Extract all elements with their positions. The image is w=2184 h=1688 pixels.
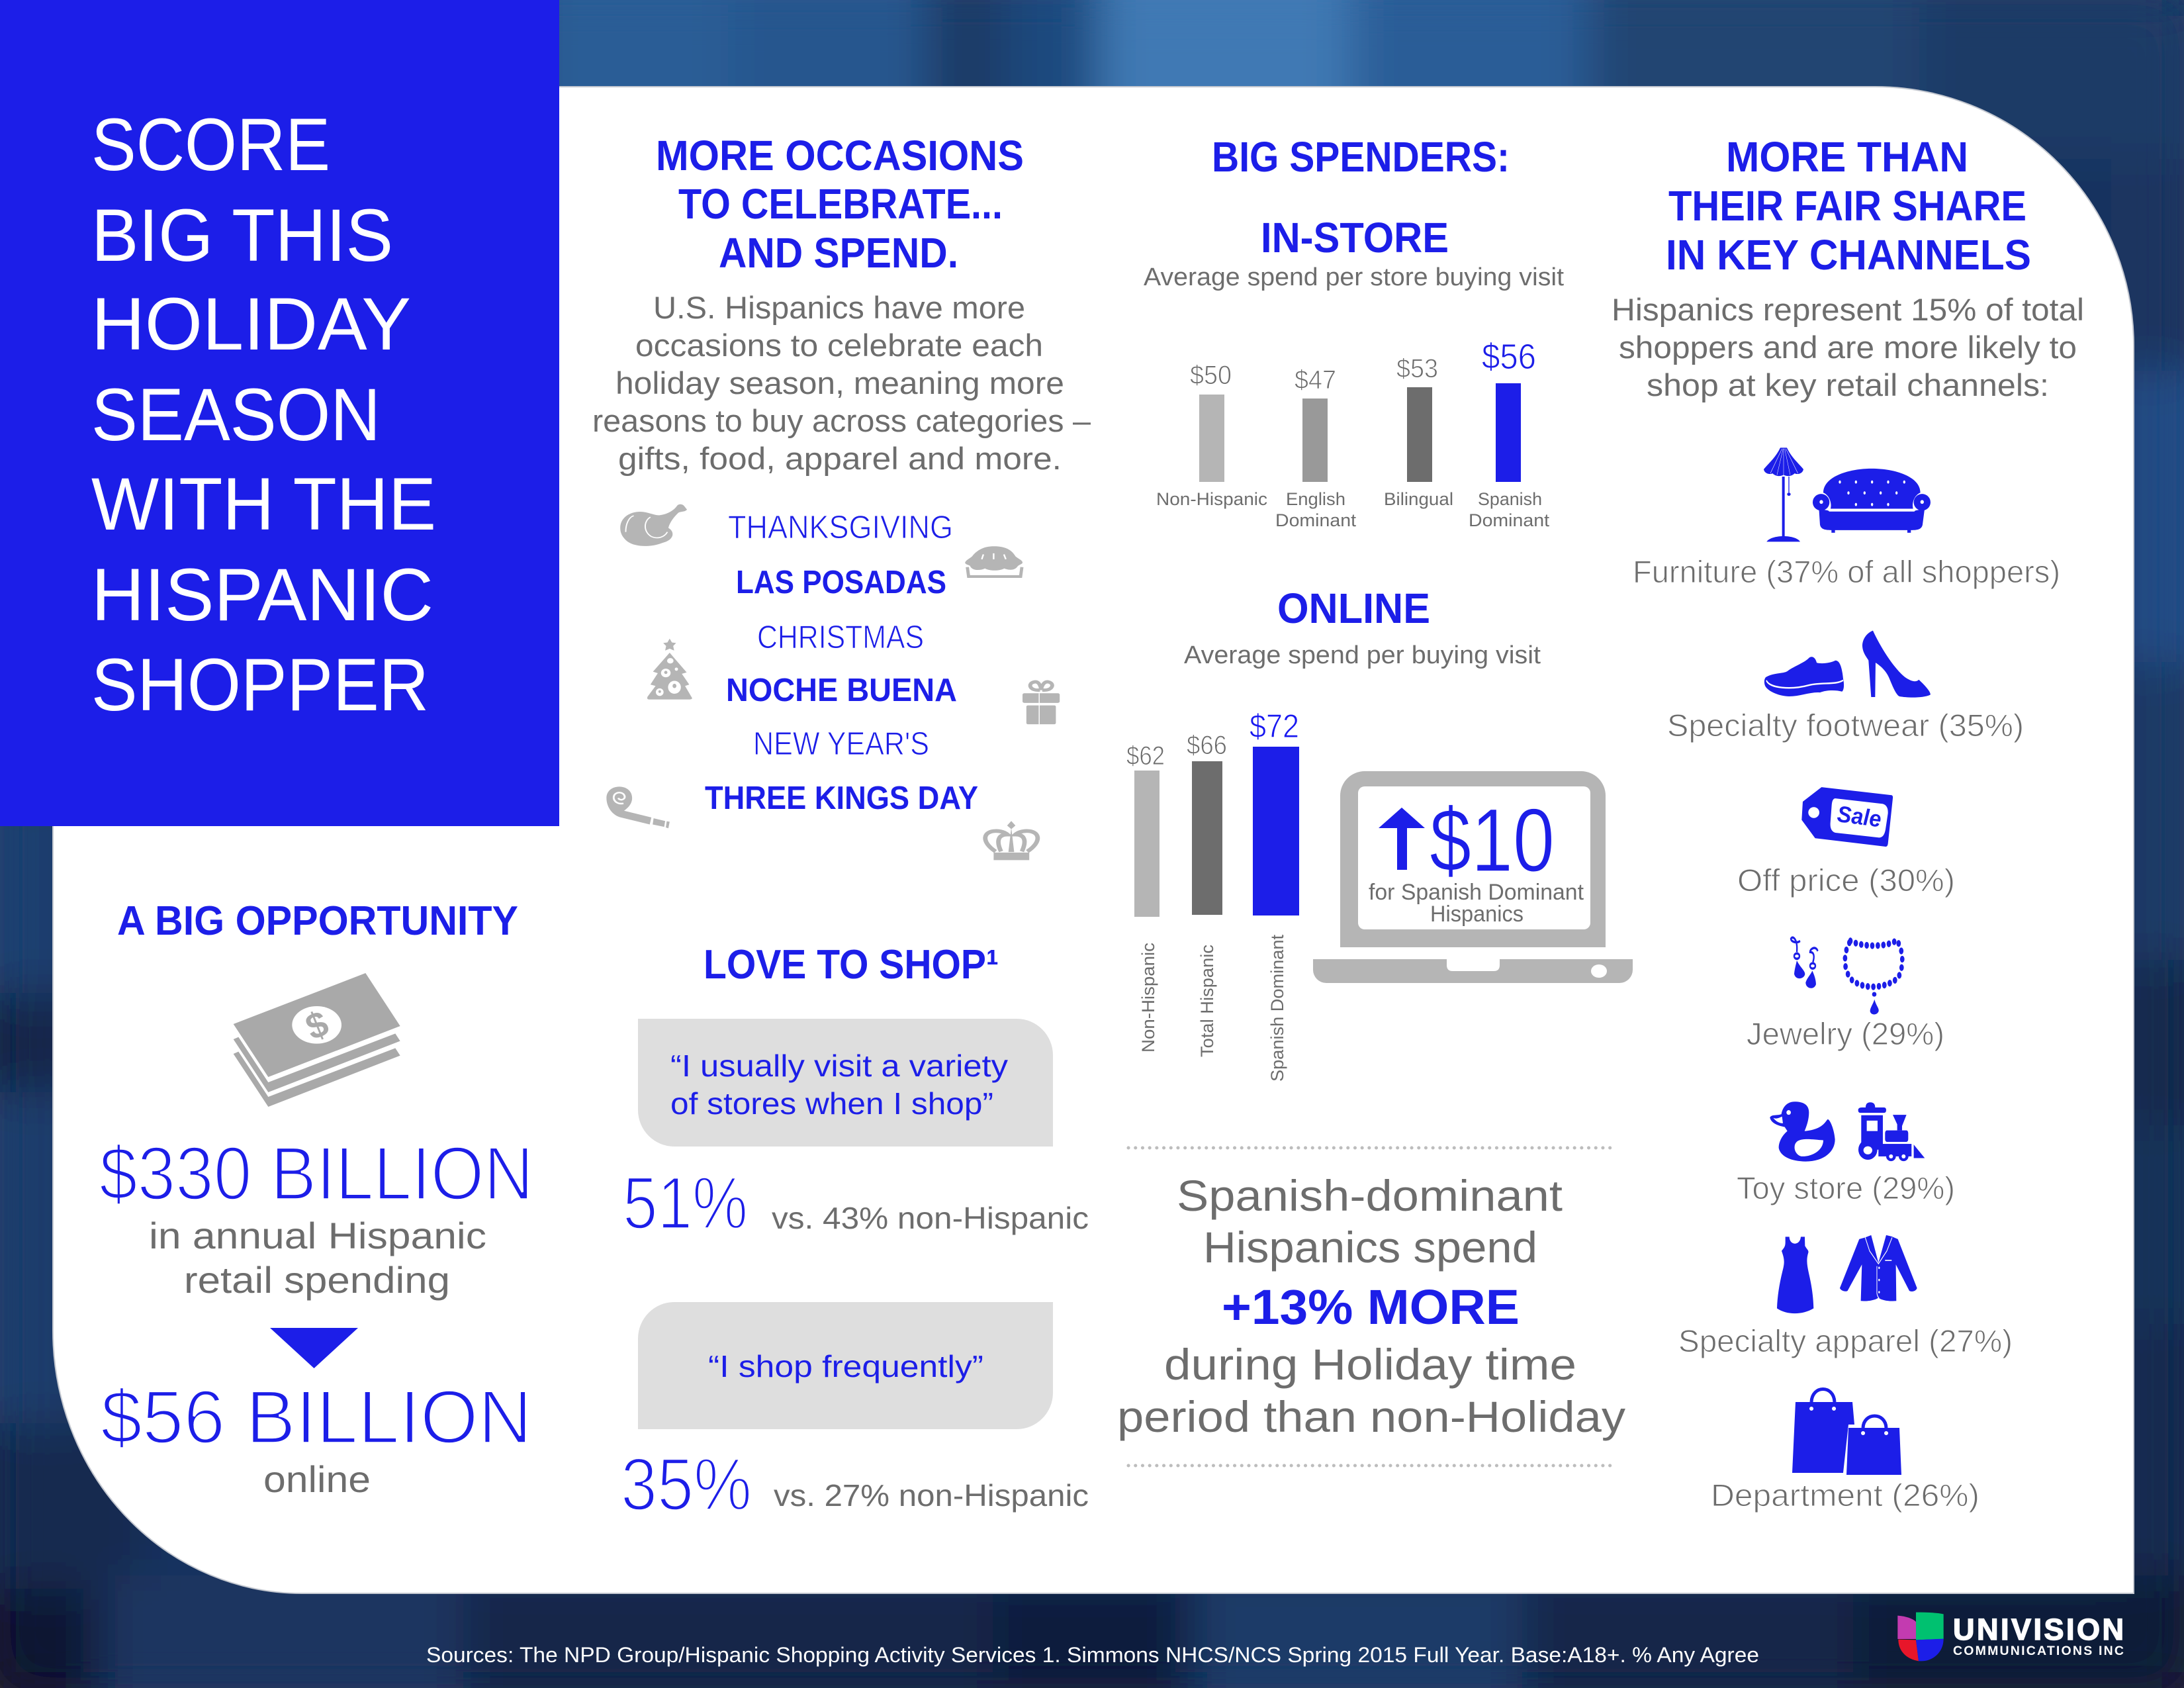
- heading: fair share: IN KEY CHANNELS: [1666, 231, 2031, 279]
- heading: more occasions: TO CELEBRATE...: [678, 180, 1003, 228]
- text: occasions paragraph: holiday season, meaning more: [615, 365, 1064, 400]
- comparison: 27 percent: vs. 27% non-Hispanic: [774, 1478, 1089, 1513]
- heading: fair share: MORE THAN: [1726, 133, 1968, 181]
- caption: for spanish dominant hispanics: [1369, 880, 1584, 927]
- bar chart: in-store spend: $47: [1295, 365, 1336, 395]
- icon: sale tag: Sale: [1837, 802, 1882, 833]
- heading: a big opportunity: A BIG OPPORTUNITY: [117, 898, 518, 944]
- channel labels: Department (26%): [1711, 1477, 1979, 1513]
- icon: down arrow: [270, 1328, 358, 1368]
- icon: gift: [1023, 682, 1060, 724]
- bar chart: online spend: [1126, 708, 1299, 1082]
- logo: univision: COMMUNICATIONS INC: [1953, 1644, 2124, 1658]
- text: in annual hispanic retail spending: in annual Hispanic: [149, 1215, 486, 1256]
- icon: rubber duck: [1770, 1102, 1835, 1162]
- bar chart: online spend: $62: [1126, 741, 1165, 771]
- icon: laptop callout: [1313, 771, 1633, 983]
- holiday list: NOCHE BUENA: [726, 673, 957, 708]
- quote: shop frequently: “I shop frequently”: [708, 1349, 983, 1383]
- title text: SHOPPER: [91, 643, 429, 726]
- text: online: online: [263, 1458, 371, 1500]
- icon: shopping bags: [1792, 1389, 1901, 1475]
- bar chart: online spend: Spanish Dominant: [1267, 935, 1287, 1082]
- heading: more occasions: AND SPEND.: [719, 229, 958, 277]
- icon: dress: [1777, 1237, 1813, 1313]
- panel: a big opportunity: [99, 898, 533, 1500]
- stat: 35 percent: 35%: [621, 1443, 752, 1526]
- text: fair share paragraph: [1612, 292, 2084, 402]
- bar chart: in-store spend: English: [1286, 489, 1345, 509]
- caption: for spanish dominant hispanics: Hispanics: [1430, 902, 1524, 927]
- bar chart: in-store spend: $56: [1482, 337, 1536, 377]
- icon: pie: [965, 546, 1023, 577]
- comparison: 43 percent: vs. 43% non-Hispanic: [772, 1201, 1089, 1235]
- icon: toy train: [1858, 1102, 1925, 1161]
- channel labels: Furniture (37% of all shoppers): [1633, 554, 2060, 589]
- title text: WITH THE: [91, 463, 436, 545]
- bar chart: online spend: Non-Hispanic: [1138, 943, 1158, 1053]
- title text: HISPANIC: [91, 553, 433, 636]
- speech bubble 1: [638, 1019, 1053, 1147]
- caption: for spanish dominant hispanics: for Spanish Dominant: [1369, 880, 1584, 905]
- heading: fair share: [1666, 133, 2031, 279]
- text: fair share paragraph: shoppers and are more likely to: [1619, 330, 2077, 365]
- channel labels: Specialty footwear (35%): [1667, 708, 2024, 743]
- callout: 13 percent more: [1117, 1171, 1625, 1441]
- title text: SCORE: [91, 103, 330, 186]
- holiday list: NEW YEAR'S: [753, 726, 929, 762]
- callout: 13 percent more: Hispanics spend: [1203, 1223, 1537, 1272]
- heading: in-store: IN-STORE: [1261, 214, 1449, 261]
- text: occasions paragraph: occasions to celebrate each: [635, 328, 1043, 363]
- channel labels: Specialty apparel (27%): [1678, 1323, 2013, 1358]
- subheading: in-store: Average spend per store buying visit: [1144, 263, 1564, 291]
- icon: stack of money: $: [300, 1002, 334, 1048]
- title text: HOLIDAY: [91, 283, 411, 365]
- text: fair share paragraph: shop at key retail channels:: [1647, 367, 2049, 402]
- icon: up arrow: [1379, 808, 1425, 870]
- icon: turkey: [620, 504, 687, 546]
- text: fair share paragraph: Hispanics represent 15% of total: [1612, 292, 2084, 327]
- callout: 13 percent more: period than non-Holiday: [1117, 1392, 1625, 1441]
- heading: online: ONLINE: [1277, 585, 1430, 632]
- title text: BIG THIS: [91, 194, 393, 277]
- callout: 13 percent more: Spanish-dominant: [1177, 1171, 1563, 1220]
- bar chart: in-store spend: Non-Hispanic: [1156, 489, 1267, 509]
- text: occasions paragraph: reasons to buy across categories –: [592, 403, 1091, 438]
- bar chart: in-store spend: Bilingual: [1384, 489, 1453, 509]
- panel: fair share: [1612, 133, 2084, 1513]
- icon: party blower: [606, 786, 670, 828]
- holiday list: LAS POSADAS: [736, 565, 946, 600]
- bar chart: online spend: $72: [1250, 708, 1299, 745]
- stat: 51 percent: 51%: [623, 1162, 748, 1244]
- holiday icons: [606, 504, 1060, 860]
- icon: earrings: [1791, 937, 1818, 988]
- panel: more occasions: [592, 132, 1091, 860]
- stat: plus 10 dollars: $10: [1430, 790, 1555, 890]
- quote: variety of stores: of stores when I shop”: [670, 1086, 993, 1121]
- quote: variety of stores: “I usually visit a variety: [670, 1049, 1008, 1083]
- icon: christmas tree: [647, 639, 692, 700]
- channel icons upper: [1764, 447, 1931, 847]
- icon: sneaker: [1764, 657, 1844, 696]
- icon: sale tag: [1801, 787, 1893, 847]
- channel labels: Toy store (29%): [1737, 1170, 1955, 1205]
- icon: lamp: [1764, 447, 1803, 541]
- icon: sofa: [1813, 469, 1931, 533]
- heading: more occasions: MORE OCCASIONS: [656, 132, 1024, 179]
- bar chart: online spend: Total Hispanic: [1197, 945, 1217, 1057]
- subheading: online: Average spend per buying visit: [1184, 641, 1541, 669]
- bar chart: in-store spend: $50: [1190, 361, 1232, 390]
- bar chart: online spend: $66: [1187, 731, 1227, 760]
- icon: univision shield: [1897, 1613, 1944, 1661]
- heading: fair share: THEIR FAIR SHARE: [1668, 182, 2026, 230]
- callout: 13 percent more: during Holiday time: [1164, 1340, 1576, 1389]
- icon: crown: [985, 821, 1038, 860]
- text: occasions paragraph: [592, 290, 1091, 476]
- stat: 56 billion: $56 BILLION: [101, 1376, 532, 1460]
- text: in annual hispanic retail spending: [149, 1215, 486, 1301]
- bar chart: in-store spend: Dominant: [1275, 510, 1357, 530]
- holiday list: THANKSGIVING: [728, 510, 953, 545]
- holiday list: THREE KINGS DAY: [705, 780, 978, 816]
- text: occasions paragraph: gifts, food, apparel and more.: [618, 441, 1062, 476]
- logo: univision: [1897, 1613, 2124, 1661]
- footer: sources: Sources: The NPD Group/Hispanic Shopping Activity Services 1. Simmons NHCS/NCS Spring 2015 Full Year. Base:A18+. % Any Agree: [426, 1643, 1759, 1667]
- callout: 13 percent more: +13% MORE: [1222, 1280, 1520, 1335]
- channel labels: Off price (30%): [1737, 863, 1955, 898]
- icon: jacket: [1840, 1235, 1917, 1301]
- title text: SEASON: [91, 373, 381, 456]
- text: occasions paragraph: U.S. Hispanics have more: [653, 290, 1025, 325]
- bar chart: in-store spend: Spanish: [1478, 489, 1542, 509]
- holiday list: CHRISTMAS: [757, 620, 924, 655]
- channel labels: Jewelry (29%): [1747, 1016, 1944, 1051]
- panel: big spenders: [1117, 133, 1633, 1466]
- icon: high heel: [1862, 631, 1931, 698]
- heading: love to shop: LOVE TO SHOP¹: [704, 942, 999, 988]
- channel labels: [1633, 554, 2060, 1513]
- bar chart: in-store spend: $53: [1396, 354, 1438, 383]
- bar chart: in-store spend: [1156, 337, 1550, 530]
- text: in annual hispanic retail spending: retail spending: [184, 1259, 450, 1301]
- heading: big spenders: BIG SPENDERS:: [1212, 133, 1510, 181]
- holiday list: [705, 510, 978, 816]
- bar chart: in-store spend: Dominant: [1469, 510, 1550, 530]
- channel icons lower: [1770, 937, 1925, 1313]
- logo: univision: UNIVISION: [1953, 1613, 2124, 1646]
- icon: stack of money: [234, 973, 400, 1107]
- speech bubble 2: [638, 1302, 1053, 1429]
- title text: [91, 103, 436, 726]
- stat: 330 billion: $330 BILLION: [99, 1132, 533, 1216]
- quote: variety of stores: [670, 1049, 1008, 1121]
- panel: love to shop: [621, 942, 1089, 1526]
- icon: necklace: [1845, 940, 1902, 1015]
- title block: [0, 0, 559, 826]
- heading: more occasions: [656, 132, 1024, 277]
